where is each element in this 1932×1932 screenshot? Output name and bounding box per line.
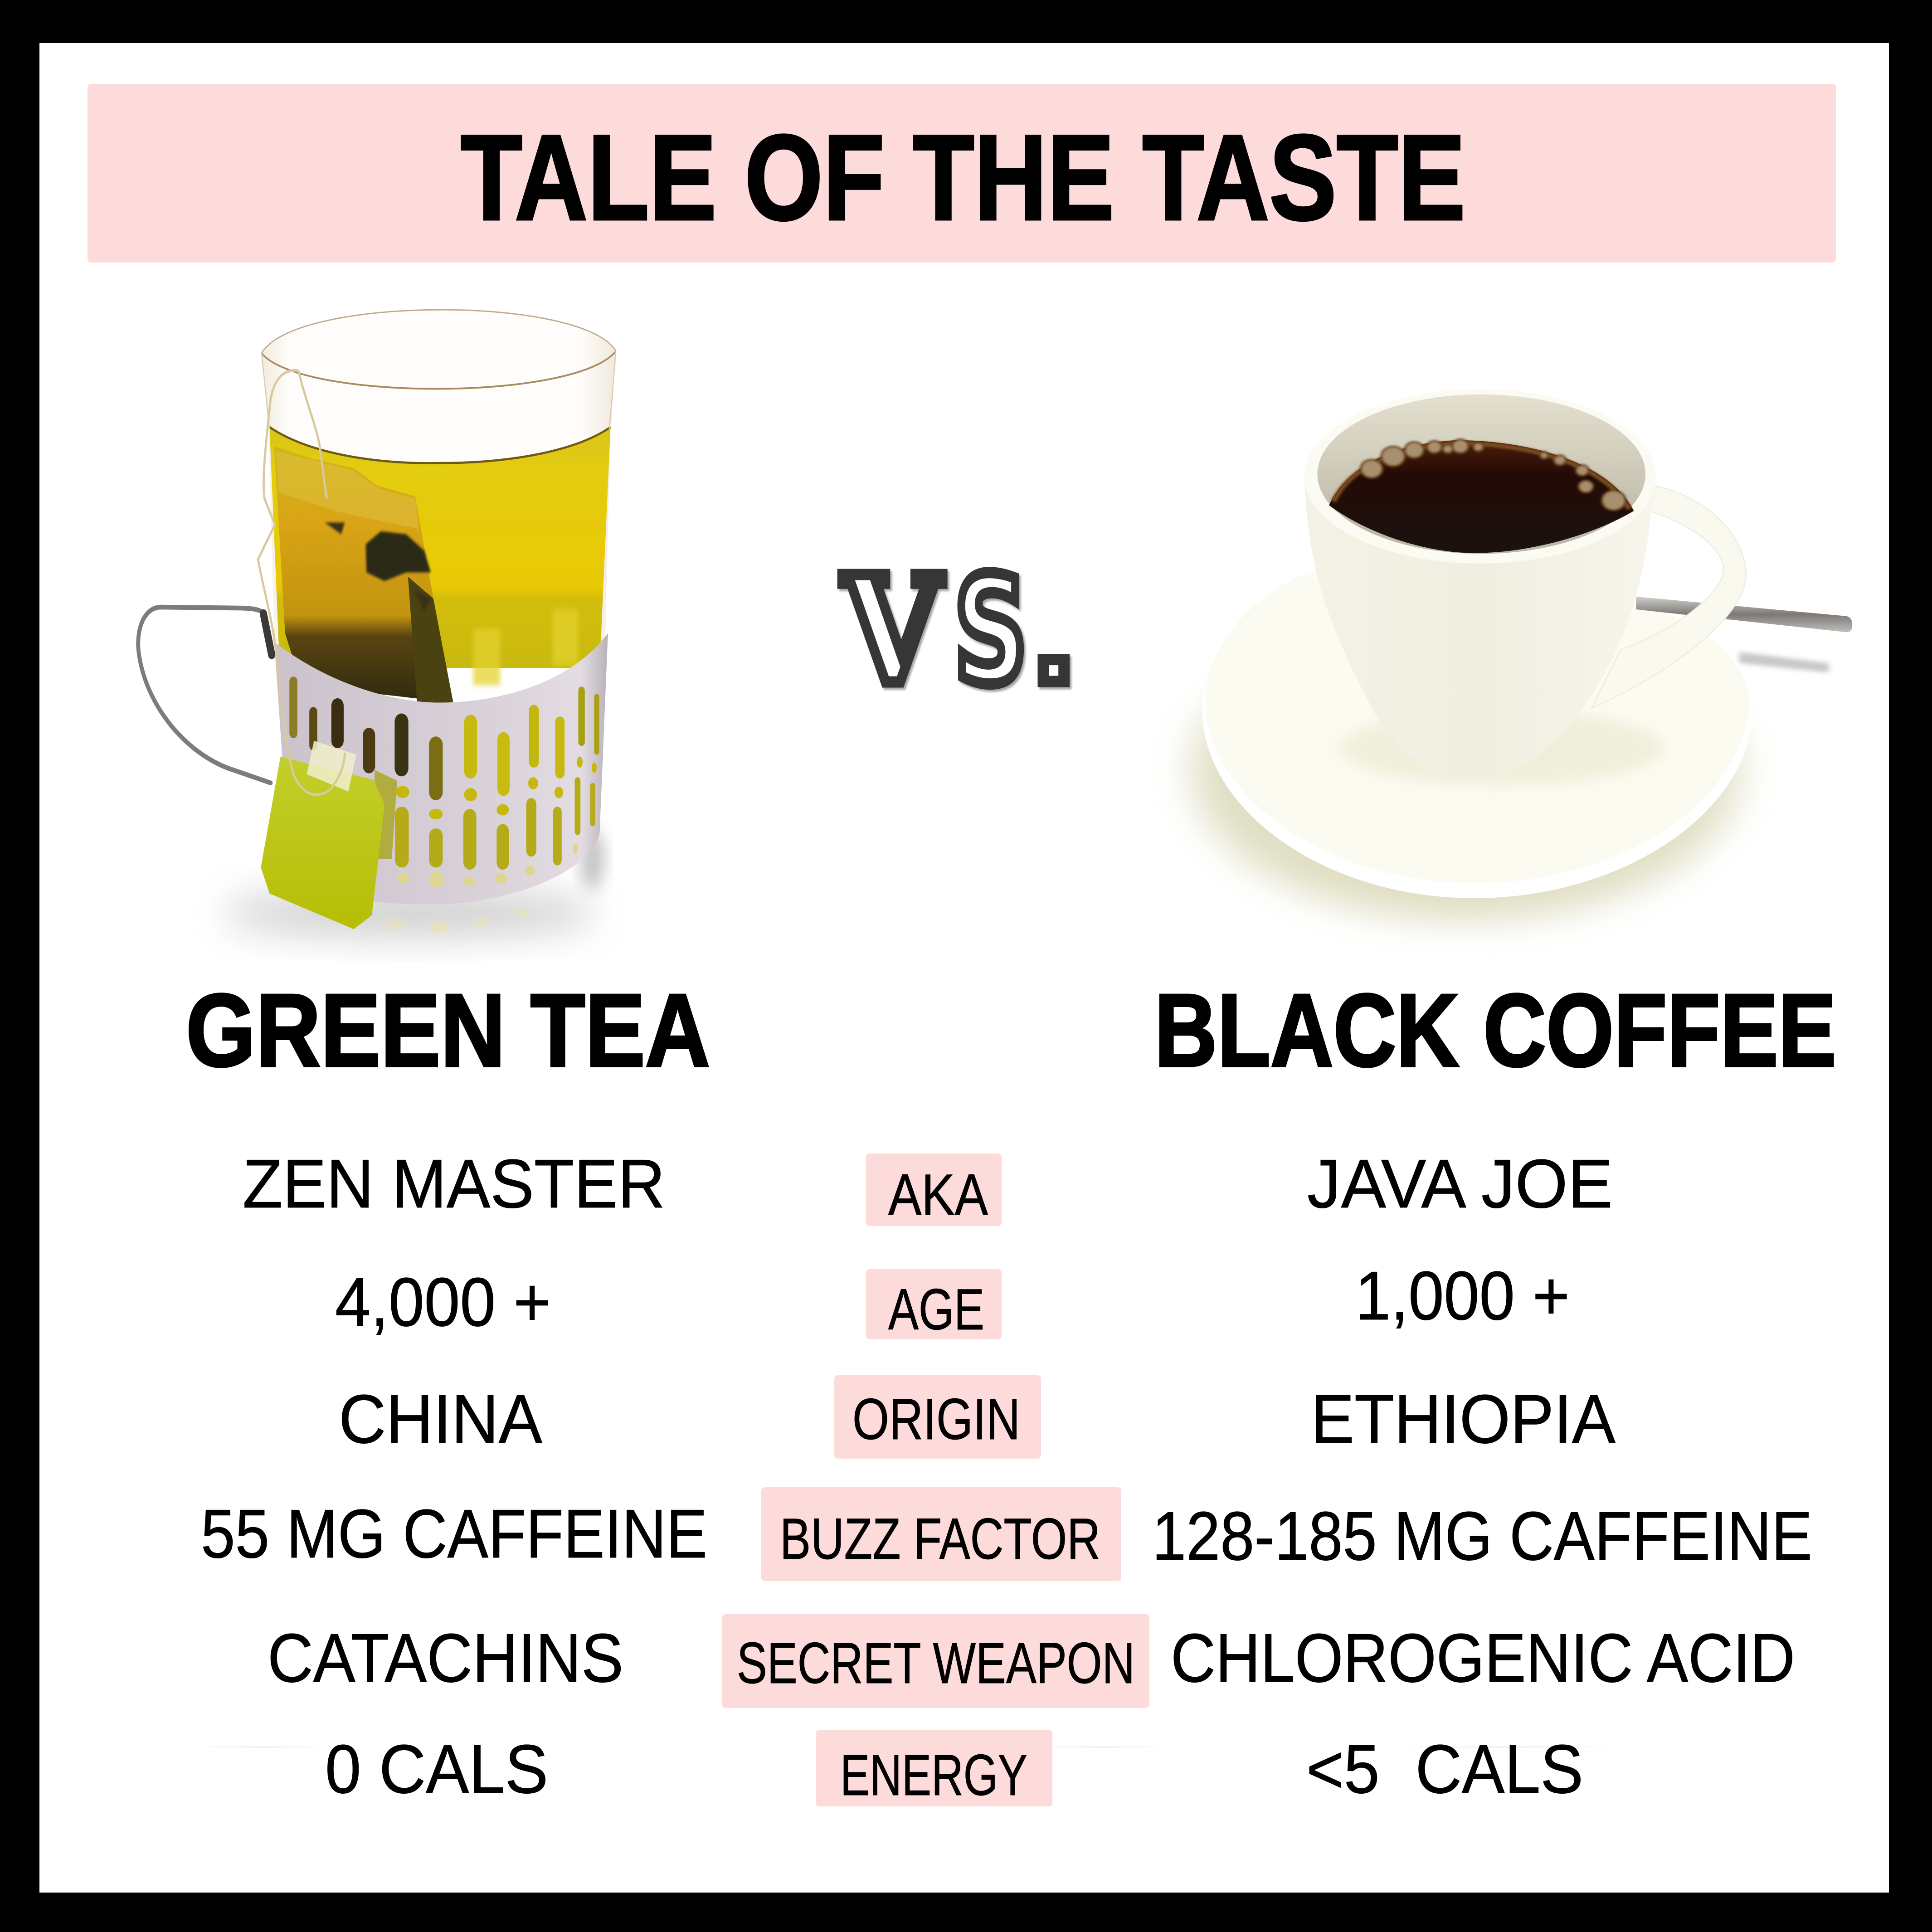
VS badge: S <box>954 545 1027 717</box>
cup interior <box>1317 394 1645 554</box>
label pill: BUZZ FACTOR: BUZZ FACTOR <box>780 1507 1100 1572</box>
tea liquid <box>269 427 610 668</box>
row: ORIGIN <box>339 1375 1616 1459</box>
label pill: BUZZ FACTOR <box>761 1487 1121 1581</box>
tea tag <box>261 741 397 929</box>
black coffee caffeine: 128-185 MG CAFFEINE <box>1152 1498 1812 1575</box>
cast shadow <box>222 828 605 935</box>
row: SECRET WEAPON <box>268 1614 1795 1708</box>
cup rim <box>1304 389 1656 564</box>
green tea calories: 0 CALS <box>325 1731 548 1808</box>
label pill: SECRET WEAPON <box>722 1614 1149 1708</box>
spoon <box>1636 597 1852 632</box>
tea leaves <box>325 522 432 612</box>
green tea caffeine: 55 MG CAFFEINE <box>201 1495 707 1572</box>
black coffee compound: CHLOROGENIC ACID <box>1171 1620 1795 1697</box>
label pill: AKA: AKA <box>888 1163 988 1227</box>
black coffee nickname: JAVA JOE <box>1307 1145 1613 1222</box>
row: BUZZ FACTOR <box>201 1487 1812 1581</box>
VS badge: V <box>841 544 944 717</box>
black coffee origin: ETHIOPIA <box>1311 1381 1616 1458</box>
illustration: black coffee cup <box>1192 389 1852 921</box>
glass body <box>262 310 616 642</box>
cup handle <box>1591 485 1746 708</box>
title: TALE OF THE TASTE <box>461 109 1465 245</box>
metal handle <box>138 607 272 783</box>
saucer shadow <box>1192 620 1829 921</box>
label pill: ENERGY <box>816 1730 1052 1808</box>
label pill: ENERGY: ENERGY <box>840 1743 1027 1808</box>
heading: green tea: GREEN TEA <box>186 973 710 1088</box>
tea string <box>258 370 345 795</box>
tea bag <box>274 447 453 703</box>
glass rim <box>262 310 616 463</box>
illustration: green tea glass <box>138 310 616 935</box>
black coffee calories: <5 CALS <box>1306 1731 1583 1808</box>
label pill: AGE: AGE <box>888 1277 984 1342</box>
label pill: ORIGIN <box>834 1375 1041 1459</box>
black coffee age: 1,000 + <box>1355 1257 1570 1334</box>
title banner <box>88 84 1836 263</box>
row: AKA <box>243 1145 1613 1227</box>
VS badge <box>841 544 1074 717</box>
green tea origin: CHINA <box>339 1381 543 1458</box>
metal holder <box>274 633 608 905</box>
green tea age: 4,000 + <box>335 1264 551 1341</box>
row: ENERGY <box>325 1730 1583 1808</box>
cup body <box>1304 470 1655 778</box>
VS badge: . <box>1033 548 1074 713</box>
holder slots <box>289 676 599 887</box>
saucer <box>1202 565 1752 898</box>
green tea compound: CATACHINS <box>268 1620 623 1697</box>
faint surface line <box>195 1746 1623 1748</box>
row: AGE <box>335 1257 1570 1342</box>
liquid light reflections <box>473 609 578 685</box>
green tea nickname: ZEN MASTER <box>243 1145 665 1222</box>
coffee bubbles <box>1333 439 1629 510</box>
label pill: ORIGIN: ORIGIN <box>852 1387 1020 1452</box>
coffee surface <box>1329 440 1634 553</box>
label pill: SECRET WEAPON: SECRET WEAPON <box>737 1631 1135 1696</box>
